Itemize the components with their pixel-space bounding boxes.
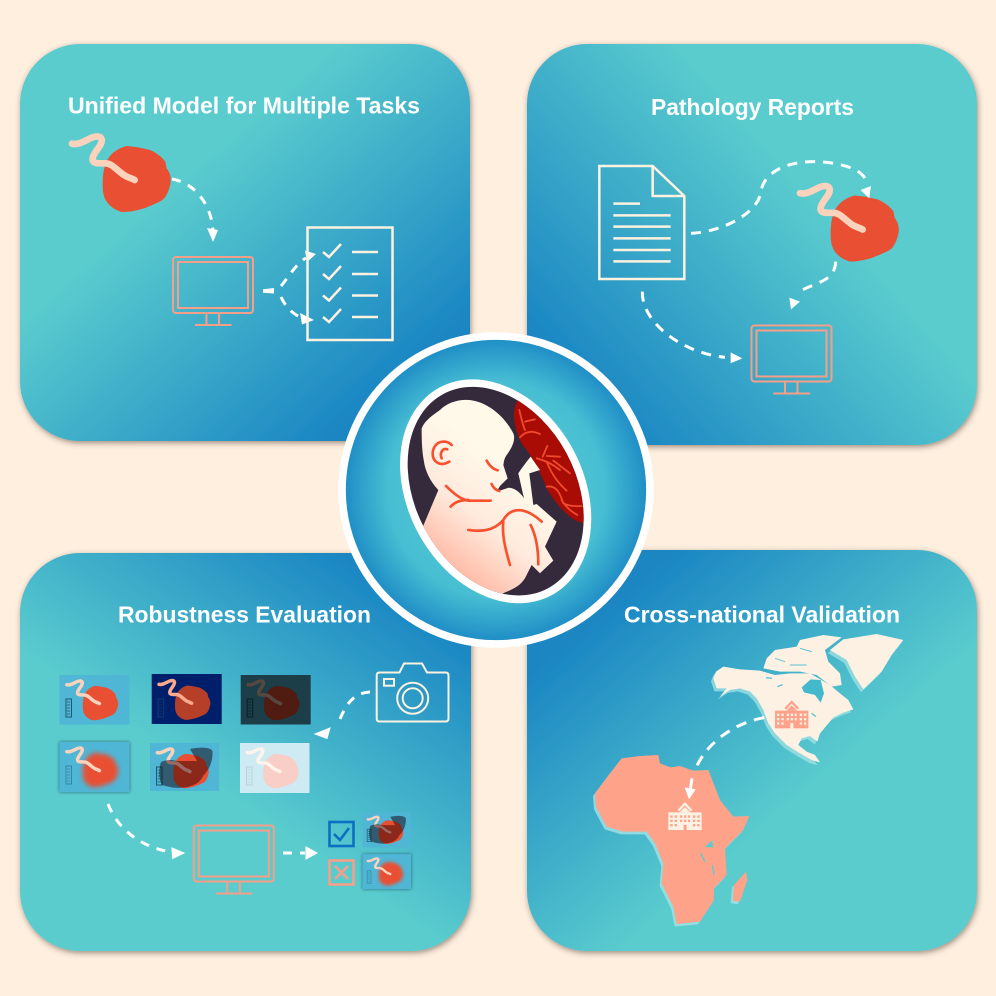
icon: monitor (robustness) [194,826,274,894]
womb interior [373,356,619,626]
thumbnail: accepted result [363,813,411,847]
map: africa [593,755,749,927]
arrow: camera to thumbnails [315,692,370,738]
thumbnail: dark blue tint [152,674,222,724]
icon: hospital (north america) [775,700,808,728]
fetus [422,400,557,597]
icon: monitor (pathology) [752,326,832,394]
panel: robustness evaluation [20,553,471,951]
arrow: north america to africa [685,718,764,799]
thumbnail: low brightness [241,675,311,724]
arrow: tissue to monitor [172,179,218,242]
icon: accepted check box [330,822,354,846]
icon: camera [377,664,448,722]
panel: cross-national validation [527,550,977,951]
womb oval [362,346,629,637]
panel: pathology reports [527,44,977,445]
thumbnail: occluded [150,743,219,791]
thumbnail: blurred [60,742,130,792]
thumbnail: original [60,675,130,724]
heading: robustness evaluation: Robustness Evaluation [118,602,371,628]
arrows: pathology flows [642,162,871,363]
placenta [514,400,584,523]
heading: unified model: Unified Model for Multiple Tasks [68,92,420,118]
icon: placenta tissue (unified model) [72,136,171,212]
icon: placenta tissue (pathology) [800,186,899,262]
icon: hospital (africa) [668,802,702,830]
heading: pathology reports: Pathology Reports [651,94,854,120]
icon: checklist [308,228,392,340]
map: north america [711,634,903,765]
heading: cross-national validation: Cross-national Validation [624,602,900,628]
icon: pathology document [599,166,684,279]
arrow: monitor to checklist [263,250,316,324]
arrow: thumbnails to monitor [108,804,184,858]
thumbnail: overexposed [240,743,310,793]
thumbnail: rejected result [363,854,411,889]
central badge [342,336,650,644]
icon: rejected cross box [330,860,354,884]
icon: monitor (unified model) [173,257,253,325]
panel: unified model [20,44,470,441]
arrow: monitor to result [283,847,317,859]
